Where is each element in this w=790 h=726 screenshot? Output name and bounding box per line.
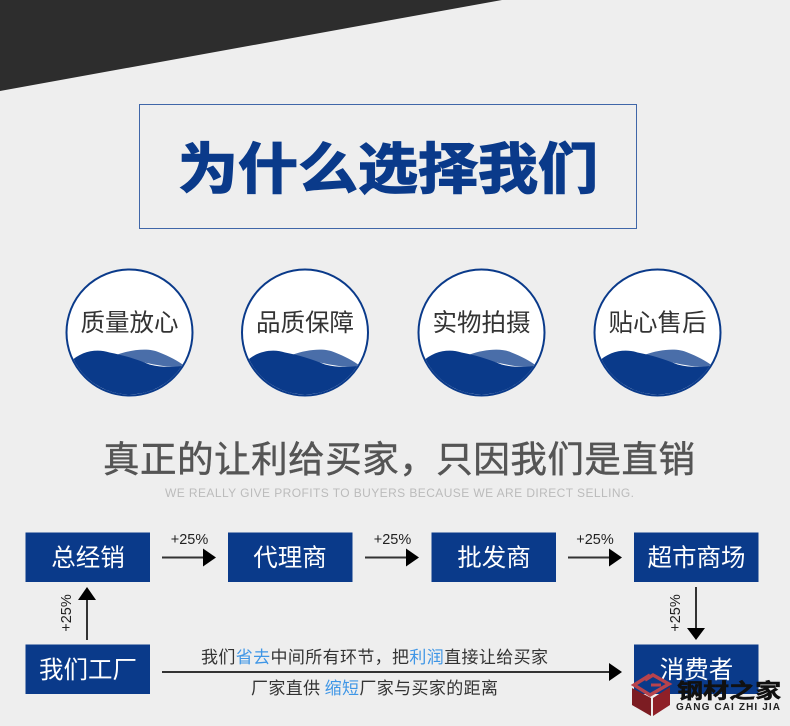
arrow: to supermarket: +25% [576,532,614,548]
arrow: factory to consumer [162,671,611,673]
badge: after sales: 贴心售后 [608,304,706,339]
box: our factory [26,644,150,694]
section subheading: WE REALLY GIVE PROFITS TO BUYERS BECAUSE WE ARE DIRECT SELLING. [165,486,634,500]
arrow: factory to distributor: +25% [59,594,75,632]
arrow: to wholesaler: +25% [374,532,411,548]
watermark logo [632,674,781,716]
badge: quality: 质量放心 [80,304,178,339]
logo text: 钢材之家 [677,674,781,704]
title: 为什么选择我们 [178,124,598,205]
box: general distributor: 总经销 [51,539,125,574]
box: wholesaler: 批发商 [457,539,531,574]
badge: real photos: 实物拍摄 [432,304,530,339]
box: supermarket: 超市商场 [648,539,746,574]
box: consumer: 消费者 [660,651,733,686]
box: agent [228,532,352,582]
arrow: to agent [162,532,216,566]
box: general distributor [26,532,150,582]
arrow: supermarket to consumer [668,587,705,640]
note: save the middle steps: 我们省去中间所有环节，把利润直接让给买家 [201,643,548,668]
box: consumer [634,644,758,694]
arrow: supermarket to consumer: +25% [668,594,684,632]
box: our factory: 我们工厂 [39,651,137,686]
arrow: to agent: +25% [171,532,208,548]
title panel [140,104,636,228]
logo latin text: GANG CAI ZHI JIA [676,702,780,713]
arrow: factory to distributor [59,587,96,640]
note: shorten distance: 厂家直供 缩短厂家与买家的距离 [251,674,498,699]
box: agent: 代理商 [253,539,327,574]
badge: guarantee: 品质保障 [256,304,354,339]
box: wholesaler [432,532,556,582]
dark corner banner [0,0,502,91]
arrow head: factory to consumer [609,663,622,681]
arrow: to wholesaler [365,532,419,566]
badge: real photos [418,270,544,402]
badge: after sales [594,270,720,402]
badge: quality [66,270,192,402]
badge: guarantee [242,270,368,402]
arrow: to supermarket [568,532,622,566]
section heading: 真正的让利给买家，只因我们是直销 [103,430,695,483]
icon: red cube [632,675,670,716]
box: supermarket [634,532,758,582]
